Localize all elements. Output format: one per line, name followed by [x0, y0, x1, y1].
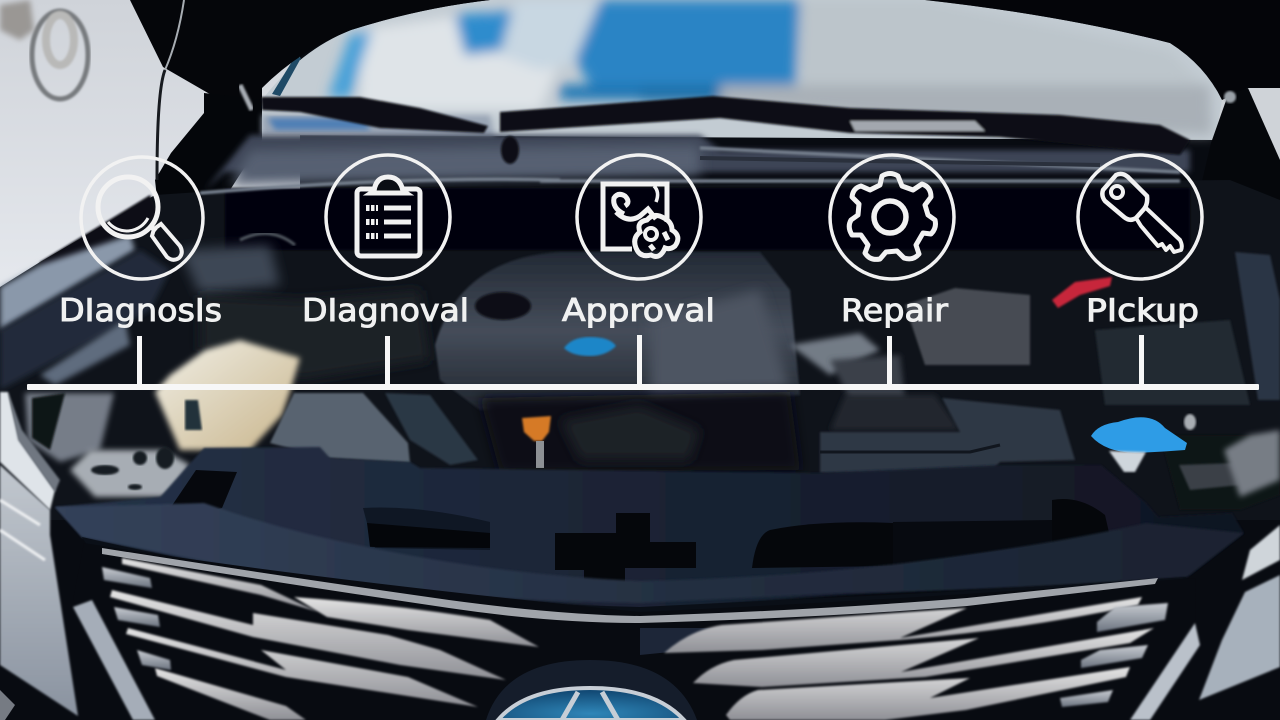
red battery terminal [1052, 277, 1112, 308]
wiper blades [261, 96, 1190, 164]
left bay components [25, 393, 114, 462]
step 1: Diagnosis [59, 157, 222, 386]
dark lower engine block [480, 392, 800, 472]
step 3: Approval [562, 155, 715, 386]
connector tick [385, 336, 390, 386]
connector tick [1139, 335, 1144, 386]
step 5: Pickup [1078, 155, 1202, 386]
label: Diagnosis: DIagnosIs [59, 293, 222, 329]
icon: gear [830, 155, 954, 279]
windshield with sky [262, 0, 1222, 140]
right headlamp [1199, 525, 1280, 700]
grille-support openings [171, 470, 237, 515]
label: Pickup: PIckup [1086, 293, 1199, 329]
upper rim of panel [55, 503, 1244, 603]
air box [830, 395, 960, 430]
radiator support panel [55, 447, 1244, 616]
open hood underside [130, 0, 1280, 225]
step 4: Repair [830, 155, 954, 386]
timeline base line [27, 384, 1259, 390]
label: Repair: Repair [841, 293, 948, 329]
icon: document with gear [577, 155, 701, 279]
engine bay base [0, 115, 1280, 520]
connector tick [637, 335, 642, 386]
blue oil cap [564, 337, 616, 356]
blue washer cap [1160, 435, 1280, 510]
coolant reservoir [155, 340, 300, 450]
icon: car key [1078, 155, 1202, 279]
icon: magnifying glass [81, 157, 203, 279]
label: Approval: Approval [562, 293, 715, 329]
icon: clipboard checklist [326, 155, 450, 279]
engine cover and parts [25, 252, 1280, 510]
connector tick [137, 336, 142, 386]
orange dipstick [522, 416, 551, 441]
step 2: Diagnoval [302, 155, 469, 386]
connector tick [887, 336, 892, 386]
car badge [486, 660, 697, 720]
front grille [73, 543, 1200, 720]
label: Diagnoval: DIagnoval [302, 293, 469, 329]
left headlamp [0, 392, 78, 720]
